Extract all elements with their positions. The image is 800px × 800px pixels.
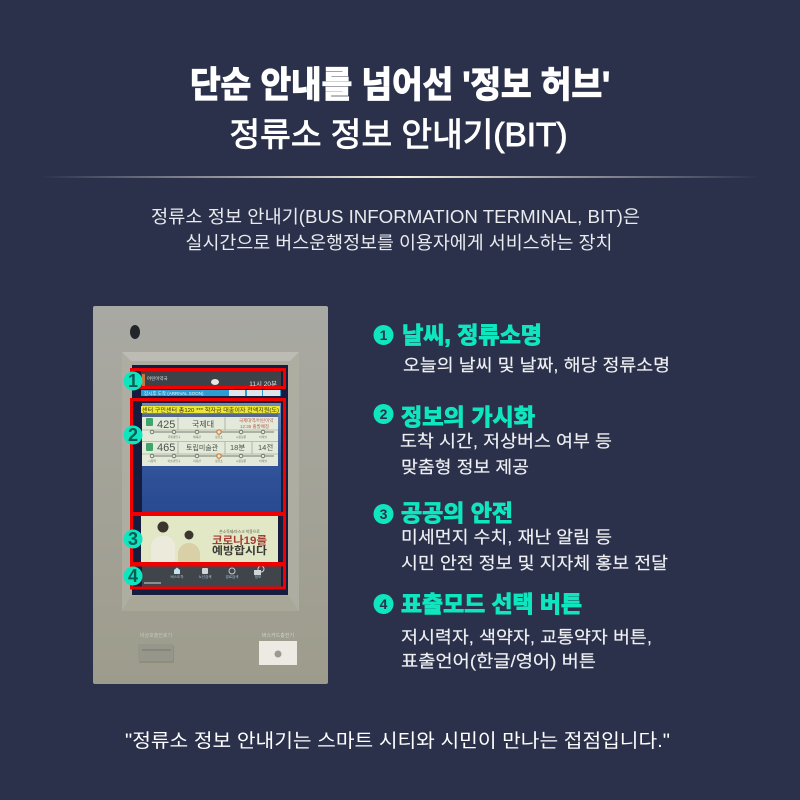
item 2: information visualization: 도착 시간, 저상버스 여부 등 (400, 432, 612, 451)
item 4: display mode buttons: 저시력자, 색약자, 교통약자 버튼, (401, 628, 652, 647)
item 4: display mode buttons: 표출모드 선택 버튼 (401, 591, 582, 617)
bus row 465: 18분 (230, 443, 245, 452)
screen: 잠시후 도착 (ARRIVAL SOON) (144, 390, 204, 397)
device photo: bus information terminal (93, 306, 328, 684)
item 1: weather and stop name: 오늘의 날씨 및 날짜, 해당 정류소명 (403, 356, 670, 375)
bus row 465: 정류소 (215, 459, 223, 463)
screen: 어린이약국 (147, 375, 168, 382)
title: 정류소 정보 안내기(BIT) (230, 116, 568, 153)
item 3: public safety (374, 500, 668, 573)
covid banner (141, 516, 278, 563)
bus row 465: 미술관 (193, 459, 201, 463)
bus row 425: 국제대입구 (168, 435, 181, 439)
device marker 3: 3 (128, 529, 138, 549)
bus row 425: 체육관 (193, 435, 201, 439)
menu buttons: 노선검색 (199, 574, 211, 579)
device marker 2: 2 (128, 425, 138, 445)
item 4: display mode buttons (374, 591, 652, 671)
bus row 425: 정류소 (215, 435, 223, 439)
port and touch reader (138, 632, 297, 665)
closing quote: "정류소 정보 안내기는 스마트 시티와 시민이 만나는 접점입니다." (125, 730, 670, 752)
menu buttons (142, 566, 281, 587)
item 1: weather and stop name (374, 322, 670, 375)
bus row 465: 터미널 (259, 459, 267, 463)
bus row 425: 터미널 (259, 435, 267, 439)
bus row 425: 12:35 출발예정 (240, 423, 269, 430)
bus row 465: 시청역 (148, 459, 156, 463)
screen (132, 365, 288, 595)
port and touch reader: 비상호출전호기 (140, 632, 172, 639)
bus row 465: 토립미술관 (186, 443, 219, 452)
intro text: 실시간으로 버스운행정보를 이용자에게 서비스하는 장치 (186, 233, 612, 253)
device marker 1 (124, 371, 142, 391)
device marker 3 (124, 529, 142, 549)
port and touch reader: 버스카드충전기 (262, 632, 294, 639)
item 3: public safety: 3 (380, 506, 388, 522)
bus row 465: 465 (157, 442, 175, 454)
device marker 4: 4 (128, 566, 138, 586)
covid banner: 코로나19를 (212, 533, 267, 547)
item 3: public safety: 시민 안전 정보 및 지자체 홍보 전달 (401, 554, 668, 573)
screen: 11시 20분 (249, 380, 277, 388)
menu buttons: 버스도착 (171, 574, 184, 579)
red highlight boxes (132, 370, 284, 588)
item 2: information visualization (374, 404, 612, 477)
intro text: 정류소 정보 안내기(BUS INFORMATION TERMINAL, BIT)은 (151, 207, 640, 227)
bus row 465: 미술관입구 (168, 459, 181, 463)
bus row 425: 국제대 (192, 420, 214, 429)
menu buttons: 정보 (255, 574, 262, 579)
item 1: weather and stop name: 날씨, 정류소명 (402, 322, 542, 348)
item 3: public safety: 미세먼지 수치, 재난 알림 등 (401, 528, 612, 547)
item 2: information visualization: 정보의 가시화 (401, 404, 535, 430)
item 1: weather and stop name: 1 (380, 327, 388, 343)
covid banner: 예방합시다 (212, 544, 267, 557)
bus row 425 (142, 417, 278, 439)
bus row 425: 국제대역/어린이약 (239, 417, 273, 424)
item 3: public safety: 공공의 안전 (401, 500, 513, 526)
covid banner: 손소독제/마스크 착용으로 (219, 529, 260, 534)
bus row 425: 시청정문 (236, 435, 247, 439)
bus row 425: 425 (157, 419, 175, 431)
item 4: display mode buttons: 표출언어(한글/영어) 버튼 (401, 652, 596, 671)
bus row 465: 시청정문 (236, 459, 247, 463)
device marker 4 (124, 566, 142, 586)
item 2: information visualization: 맞춤형 정보 제공 (401, 458, 529, 477)
device marker 2 (124, 425, 142, 445)
intro text (151, 207, 640, 253)
screen: 센터 구민센터 총120 *** 학자금 대출이자 전액지원(도) (142, 406, 279, 414)
device marker 1: 1 (128, 371, 138, 391)
item 2: information visualization: 2 (380, 406, 388, 422)
item 4: display mode buttons: 4 (380, 596, 388, 612)
bus row 465 (142, 442, 278, 463)
title: 단순 안내를 넘어선 '정보 허브' (190, 64, 610, 105)
menu buttons: 경로검색 (226, 574, 238, 579)
title (190, 64, 610, 153)
bus row 465: 14전 (258, 442, 273, 452)
